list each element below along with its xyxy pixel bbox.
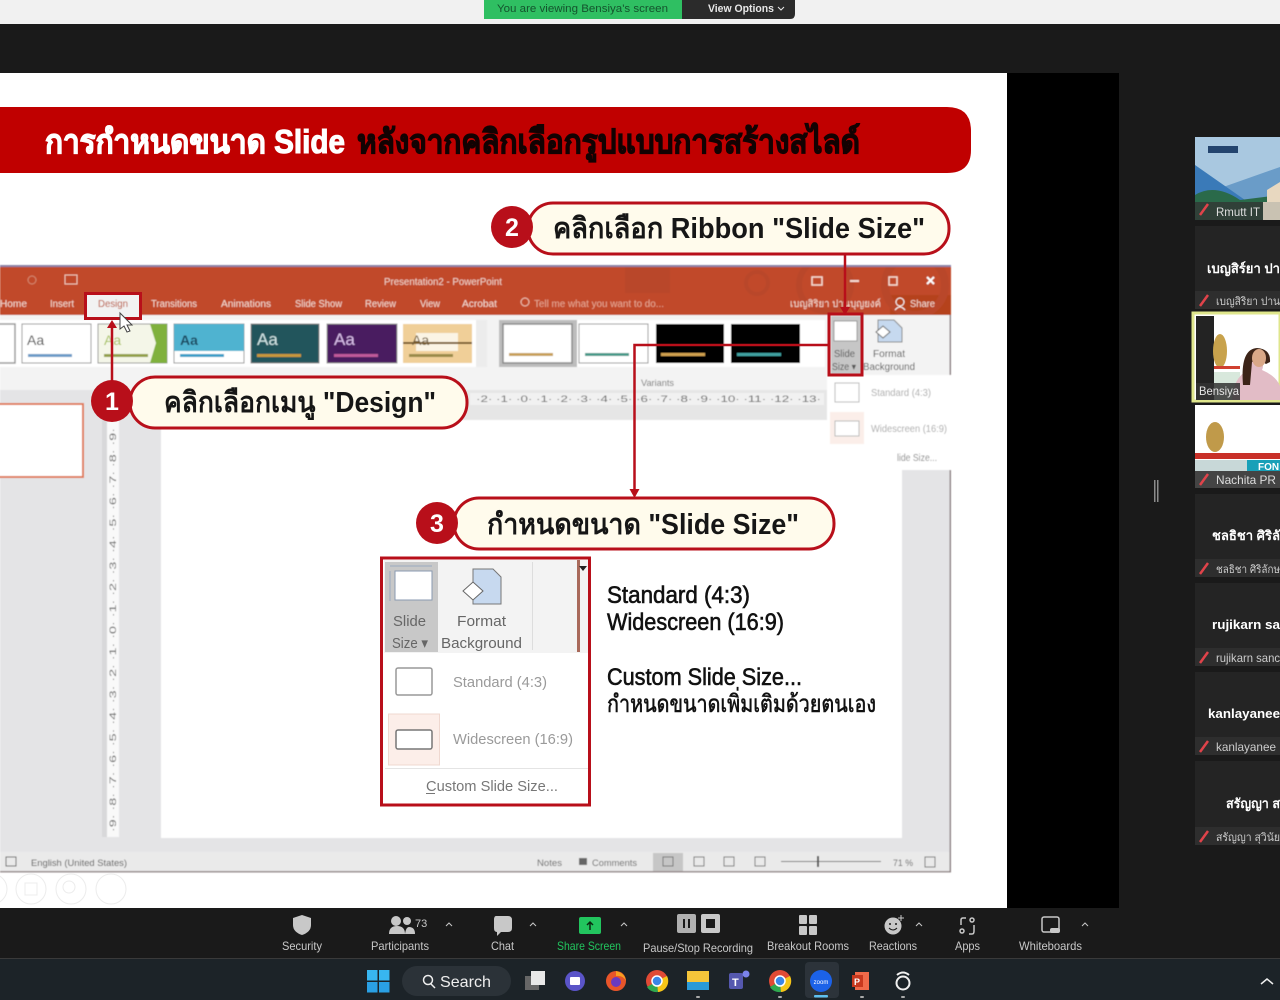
description text: Custom Slide Size...: [607, 664, 802, 691]
status bar: 71 %: [893, 858, 914, 869]
icon: slide size: [390, 566, 432, 601]
icon: file explorer: [687, 971, 709, 998]
arrow: Slide Size button to callout 3: [630, 345, 829, 498]
dropdown preview in ribbon: Standard (4:3): [871, 388, 931, 399]
title bar and tabs: [0, 264, 952, 316]
zoom toolbar: Apps: [955, 939, 980, 953]
inset: Slide Size menu: Background: [441, 635, 522, 652]
inset: Slide Size menu: Format: [457, 613, 507, 630]
horizontal ruler: [0, 390, 951, 420]
title bar and tabs: Insert: [50, 299, 74, 310]
taskbar search: Search: [440, 974, 491, 991]
theme thumbnails: Aa: [412, 332, 429, 348]
icon: meet: [565, 971, 585, 991]
participant tile: เบญสิริยา: เบญสิร์ยา ปา: [1207, 261, 1280, 277]
icon: teams: [729, 970, 750, 989]
inset: Slide Size menu: Size ▾: [392, 635, 428, 652]
slide size button: Slide: [834, 349, 855, 360]
slide size button: [831, 316, 861, 374]
vertical ruler: [102, 420, 119, 837]
title banner: การกำหนดขนาด Slide: [45, 123, 345, 160]
callout 3: กำหนดขนาด "Slide Size": [487, 509, 799, 541]
highlight box: Design tab: [86, 294, 140, 318]
icon: powerpoint: P: [854, 977, 860, 987]
callout 3: 3: [430, 510, 444, 538]
format background button: [863, 320, 915, 373]
zoom toolbar: Participants: [371, 939, 429, 953]
slide background: [0, 73, 1007, 908]
theme thumbnails: Aa: [180, 332, 198, 348]
ribbon: [0, 315, 951, 390]
participant tile: เบญสิริยา: [1195, 226, 1280, 309]
icon: whiteboards: [1042, 917, 1060, 933]
title bar and tabs: Animations: [221, 299, 271, 310]
zoom top bar: [0, 0, 1280, 24]
participant tile: สรัญญา: [1195, 761, 1280, 845]
description text: Standard (4:3): [607, 582, 750, 609]
black letterbox: [1007, 73, 1119, 908]
title bar and tabs: View: [420, 299, 441, 310]
title banner: [0, 107, 971, 173]
icon: apps: [960, 918, 974, 934]
title bar and tabs: Tell me what you want to do...: [534, 299, 664, 310]
title bar and tabs: Slide Show: [295, 299, 343, 310]
format background button: Background: [863, 362, 915, 373]
zoom toolbar: Share Screen: [557, 939, 621, 953]
theme thumbnails: Aa: [27, 332, 44, 348]
zoom toolbar: Chat: [491, 939, 515, 953]
arrow: callout 1 to Design tab: [107, 320, 117, 385]
horizontal ruler: ·2· ·1· ·0· ·1· ·2· ·3· ·4· ·5· ·6· ·7· ·8· ·9· ·10· ·11· ·12· ·13·: [476, 394, 821, 404]
dropdown preview in ribbon: Widescreen (16:9): [871, 424, 947, 435]
participant tile: rujikarn: rujikarn sa: [1212, 617, 1280, 632]
callout 1: คลิกเลือกเมนู "Design": [164, 387, 436, 420]
icon: mouse cursor: [120, 313, 132, 332]
zoom top bar: You are viewing Bensiya's screen: [497, 3, 668, 15]
icon: reactions: [884, 915, 904, 934]
icon: powerpoint: [852, 972, 869, 998]
gallery divider handle: [1154, 480, 1158, 502]
participant tile: ชลธิชา: ชลธิชา ศิริลั: [1212, 528, 1280, 543]
ribbon: Variants: [641, 378, 674, 389]
title bar and tabs: Transitions: [151, 299, 197, 310]
icon: teams: T: [732, 977, 739, 989]
icon: ring app: [896, 972, 910, 998]
title bar and tabs: Review: [365, 299, 397, 310]
zoom toolbar: Breakout Rooms: [767, 939, 849, 953]
taskbar search: [402, 966, 511, 996]
callout 1: [91, 377, 467, 428]
title bar and tabs: Home: [0, 299, 27, 310]
participant tile: kanlayanee: kanlayanee: [1208, 706, 1280, 721]
status bar: English (United States): [31, 858, 127, 869]
icon: zoom: [805, 962, 839, 998]
icon: format background: [463, 569, 501, 604]
icon: chat: [494, 916, 512, 936]
callout 3: [416, 498, 834, 549]
icon: pause and stop: [677, 914, 720, 933]
icon: breakout rooms: [799, 915, 817, 935]
highlight box: Slide Size button: [829, 314, 862, 375]
dropdown preview in ribbon: lide Size...: [897, 453, 937, 464]
theme thumbnails: Aa: [104, 332, 121, 348]
variant thumbnails: [499, 320, 825, 367]
inset: Slide Size menu: Standard (4:3): [453, 674, 547, 691]
title bar and tabs: Presentation2 - PowerPoint: [384, 277, 502, 288]
slide canvas: [161, 420, 902, 838]
participant tile: Nachita PR: Nachita PR: [1216, 473, 1276, 487]
theme thumbnails: Aa: [334, 330, 355, 349]
participant tile: Nachita PR: FON: [1258, 462, 1279, 473]
description text: [607, 582, 876, 718]
title bar and tabs: Design: [98, 299, 128, 310]
description text: กำหนดขนาดเพิ่มเติมด้วยตนเอง: [607, 687, 876, 718]
zoom top bar: View Options: [708, 3, 774, 15]
participant tile: Bensiya (active speaker): [1193, 313, 1280, 401]
icon: chrome: [646, 970, 668, 992]
title bar and tabs: เบญสิริยา ปานบุญยงค์: [790, 298, 881, 310]
theme thumbnails: Aa: [257, 330, 278, 349]
zoom toolbar: [0, 908, 1280, 958]
zoom toolbar: Reactions: [869, 939, 917, 953]
title bar and tabs: Share: [910, 299, 935, 310]
icon: zoom: zoom: [814, 980, 828, 986]
status bar: Comments: [592, 858, 637, 869]
participant tile: Rmutt IT: Rmutt IT: [1216, 205, 1261, 219]
icon: chrome 2: [769, 970, 791, 998]
zoom toolbar: Whiteboards: [1019, 939, 1082, 953]
participant tile: ชลธิชา: [1195, 494, 1280, 577]
description text: Widescreen (16:9): [607, 609, 784, 636]
icon: task view: [525, 971, 545, 990]
participant tile: Rmutt IT: [1195, 137, 1280, 220]
arrow: callout 2 to Slide Size button: [840, 254, 850, 315]
windows taskbar: [0, 958, 1280, 1000]
participant tile: kanlayanee: kanlayanee: [1216, 740, 1276, 754]
callout 2: [491, 203, 949, 254]
theme thumbnails: [22, 324, 472, 363]
format background button: Format: [873, 349, 905, 360]
presenter controls faint: [0, 874, 126, 904]
status bar: Notes: [537, 858, 562, 869]
title banner: หลังจากคลิกเลือกรูปแบบการสร้างสไลด์: [357, 122, 860, 163]
inset: Slide Size menu: Slide: [393, 613, 426, 630]
participant tile: Bensiya (active speaker): Bensiya: [1199, 384, 1239, 398]
zoom toolbar: 73: [415, 918, 427, 930]
icon: windows start: [367, 970, 390, 992]
callout 2: 2: [505, 214, 519, 242]
status bar: [0, 852, 951, 872]
slide size button: Size ▾: [832, 362, 856, 373]
icon: firefox: [606, 971, 626, 991]
vertical ruler: ·9· ·8· ·7· ·6· ·5· ·4· ·3· ·2· ·1· ·0· ·1· ·2· ·3· ·4· ·5· ·6· ·7· ·8· ·9·: [108, 428, 118, 832]
participant tile: kanlayanee: [1195, 672, 1280, 755]
dropdown preview in ribbon: [827, 375, 951, 470]
zoom toolbar: Security: [282, 939, 322, 953]
callout 2: คลิกเลือก Ribbon "Slide Size": [553, 213, 925, 245]
zoom toolbar: Pause/Stop Recording: [643, 941, 753, 955]
inset: Slide Size menu: Widescreen (16:9): [453, 731, 573, 748]
participant tile: Nachita PR: [1195, 405, 1280, 488]
PowerPoint window screenshot: [0, 255, 951, 872]
icon: participants: [389, 916, 415, 934]
callout 1: 1: [105, 388, 119, 416]
icon: security: [293, 915, 311, 935]
participant tile: rujikarn: [1195, 583, 1280, 666]
inset: Slide Size menu: Custom Slide Size...: [426, 778, 558, 795]
thumbnail panel: [0, 390, 102, 852]
icon: share screen: [579, 917, 601, 934]
inset: Slide Size menu: [382, 558, 590, 805]
title bar and tabs: Acrobat: [462, 299, 497, 310]
